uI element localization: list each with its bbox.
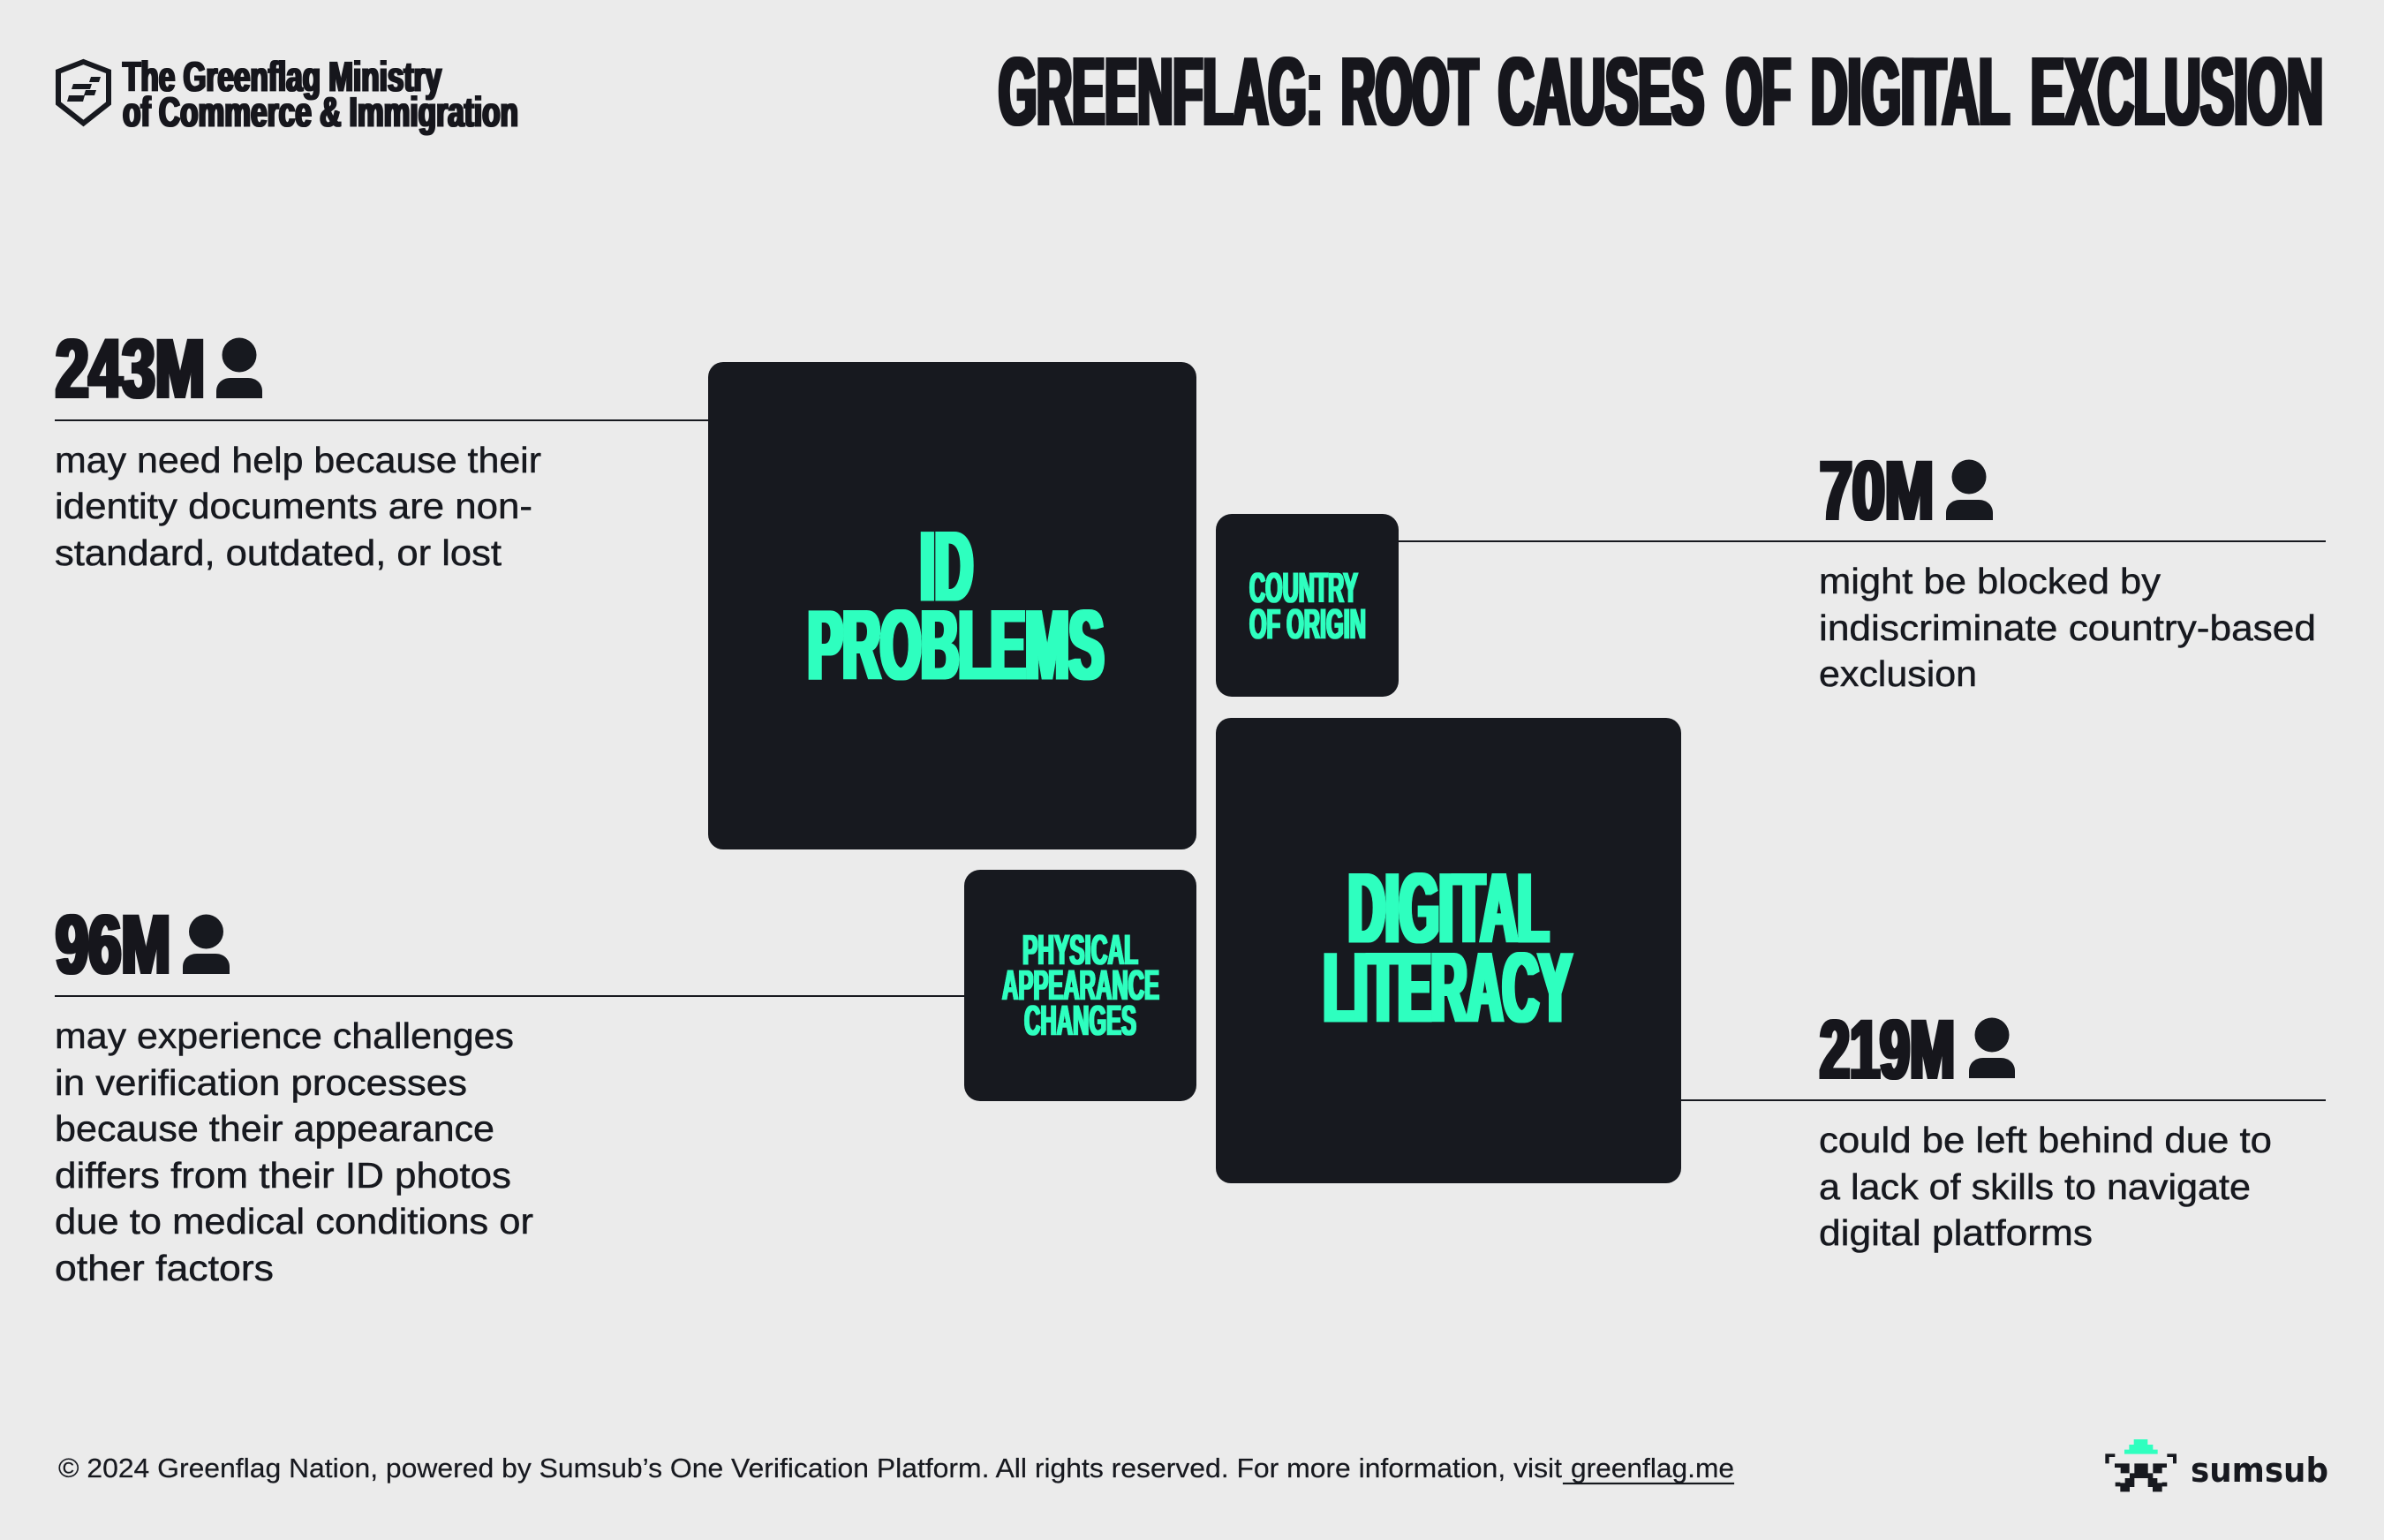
description: may experience challenges xyxy=(55,1015,514,1056)
panel: digital literacy: DIGITAL xyxy=(1348,853,1549,963)
number: 219M: 219M xyxy=(1820,1003,1955,1097)
title: DIGITAL xyxy=(1811,38,2010,146)
number: 96M: 96M xyxy=(56,898,170,992)
description xyxy=(1819,561,2316,694)
icon: sumsub pixel figure xyxy=(2105,1439,2177,1491)
panel: ID problems: PROBLEMS xyxy=(808,590,1104,700)
panel: 70M stat xyxy=(1399,444,2326,694)
description: other factors xyxy=(55,1248,274,1288)
icon: person xyxy=(216,337,262,398)
panel: 243M stat xyxy=(55,322,709,573)
wordmark: sumsub xyxy=(2191,1451,2328,1490)
panel: country of origin xyxy=(1216,514,1399,697)
header logo: ministry xyxy=(58,53,518,135)
description: could be left behind due to xyxy=(1819,1120,2272,1160)
connector line xyxy=(1681,1099,2326,1101)
description: may need help because their xyxy=(55,440,541,480)
panel: 219M stat xyxy=(1681,1003,2326,1253)
description: might be blocked by xyxy=(1819,561,2161,601)
description: due to medical conditions or xyxy=(55,1201,533,1242)
panel: physical appearance changes: CHANGES xyxy=(1024,998,1136,1045)
description: identity documents are non- xyxy=(55,486,532,526)
footer copyright: © 2024 Greenflag Nation, powered by Sumsub’s One Verification Platform. All rights reserved. For more information, visit xyxy=(58,1453,1562,1483)
connector line xyxy=(1399,540,2326,542)
title: GREENFLAG: xyxy=(999,38,1323,146)
icon: shield xyxy=(58,62,109,124)
panel: physical appearance changes xyxy=(964,870,1196,1101)
description: because their appearance xyxy=(55,1108,494,1149)
title: CAUSES xyxy=(1498,38,1704,146)
panel: 96M stat xyxy=(55,898,965,1288)
connector line xyxy=(55,419,709,421)
ministry name xyxy=(123,53,518,135)
description: in verification processes xyxy=(55,1062,467,1103)
description xyxy=(55,1015,533,1288)
footer copyright: greenflag.me xyxy=(1571,1453,1734,1483)
icon: person xyxy=(183,915,230,974)
ministry name: of Commerce & Immigration xyxy=(123,88,518,135)
description: standard, outdated, or lost xyxy=(55,532,502,573)
title xyxy=(999,38,2323,146)
description: exclusion xyxy=(1819,653,1977,694)
description xyxy=(55,440,541,573)
description: differs from their ID photos xyxy=(55,1155,511,1196)
title: ROOT xyxy=(1341,38,1478,146)
panel: physical appearance changes: PHYSICAL xyxy=(1022,927,1138,974)
description: a lack of skills to navigate xyxy=(1819,1166,2251,1207)
title: OF xyxy=(1726,38,1791,146)
connector line xyxy=(55,995,965,997)
description: indiscriminate country-based xyxy=(1819,608,2316,648)
panel: digital literacy: LITERACY xyxy=(1324,932,1572,1043)
description xyxy=(1819,1120,2272,1253)
icon: person xyxy=(1946,459,1993,520)
number: 70M: 70M xyxy=(1820,444,1934,538)
icon: person xyxy=(1969,1017,2015,1078)
sumsub logo xyxy=(2105,1439,2328,1491)
panel: ID problems: ID xyxy=(920,511,973,622)
number: 243M: 243M xyxy=(56,322,205,416)
panel: ID problems xyxy=(708,362,1196,849)
panel: country of origin: COUNTRY xyxy=(1249,565,1358,612)
panel: digital literacy xyxy=(1216,718,1681,1183)
panel: physical appearance changes: APPEARANCE xyxy=(1002,962,1159,1009)
ministry name: The Greenflag Ministry xyxy=(123,53,441,100)
description: digital platforms xyxy=(1819,1212,2093,1253)
panel: country of origin: OF ORIGIN xyxy=(1249,601,1366,648)
